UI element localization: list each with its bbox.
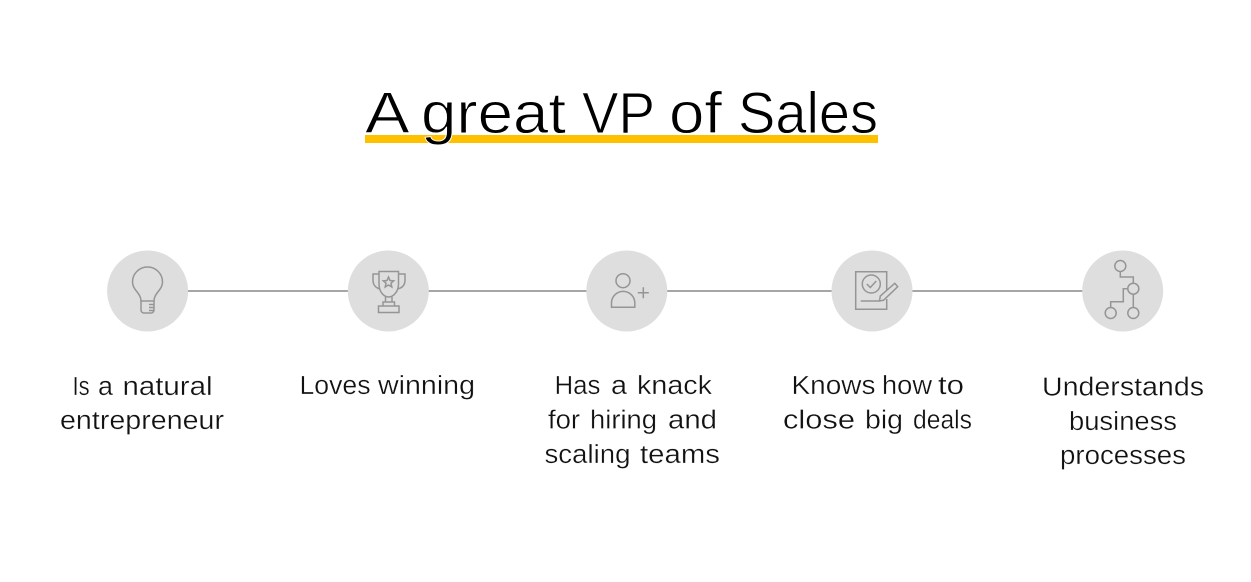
- title with yellow underline: great: [421, 81, 566, 146]
- label: Has a knack for hiring and scaling teams: for: [548, 406, 581, 434]
- label: Has a knack for hiring and scaling teams: Has: [554, 372, 600, 400]
- label: Is a natural entrepreneur: a: [98, 373, 114, 401]
- label: Is a natural entrepreneur: natural: [122, 373, 212, 401]
- connector line: [147, 290, 1123, 292]
- title with yellow underline: [365, 81, 878, 146]
- label: Knows how to close big deals: big: [865, 406, 903, 434]
- label: Has a knack for hiring and scaling teams: teams: [640, 441, 720, 469]
- icon: trophy: [348, 250, 429, 332]
- icon: signed document: [832, 250, 912, 332]
- icon: process flow: [1082, 250, 1163, 332]
- label: Loves winning: winning: [377, 372, 475, 400]
- label: Has a knack for hiring and scaling teams: knack: [637, 372, 712, 400]
- label: Is a natural entrepreneur: entrepreneur: [60, 407, 225, 435]
- step 2: loves winning: [300, 250, 475, 400]
- icon: light bulb: [107, 250, 188, 332]
- label: Has a knack for hiring and scaling teams: and: [668, 406, 717, 434]
- label: Knows how to close big deals: to: [938, 372, 964, 400]
- icon: person with plus: [586, 250, 667, 332]
- label: Understands business processes: processes: [1060, 442, 1186, 470]
- step 3: hiring and scaling teams: [544, 250, 720, 469]
- step 4: close big deals: [783, 250, 972, 434]
- label: Knows how to close big deals: deals: [913, 406, 972, 434]
- title with yellow underline: VP: [582, 81, 654, 146]
- label: Understands business processes: business: [1069, 408, 1177, 436]
- step 5: business processes: [1042, 250, 1204, 470]
- label: Understands business processes: Understands: [1042, 374, 1204, 402]
- label: Has a knack for hiring and scaling teams: a: [611, 372, 628, 400]
- title with yellow underline: of: [669, 81, 723, 146]
- label: Is a natural entrepreneur: Is: [72, 373, 90, 401]
- label: Knows how to close big deals: how: [882, 372, 933, 400]
- label: Knows how to close big deals: close: [783, 406, 855, 434]
- label: Knows how to close big deals: Knows: [792, 372, 876, 400]
- title with yellow underline: A: [365, 81, 410, 146]
- label: Has a knack for hiring and scaling teams: scaling: [544, 441, 630, 469]
- label: Loves winning: Loves: [300, 372, 370, 400]
- step 1: natural entrepreneur: [60, 250, 225, 435]
- title with yellow underline: Sales: [738, 81, 878, 146]
- label: Has a knack for hiring and scaling teams: hiring: [590, 406, 657, 434]
